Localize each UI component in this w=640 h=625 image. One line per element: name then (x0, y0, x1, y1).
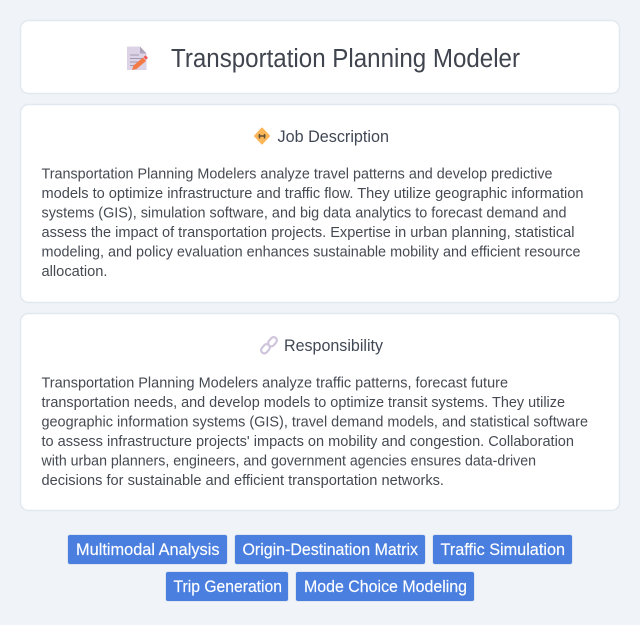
text block: responsibility: decisions for sustainable and efficient transportation networks. (42, 472, 444, 489)
panel: title header (20, 20, 620, 94)
icon: road sign (255, 128, 269, 144)
tag: Multimodal Analysis (68, 534, 228, 564)
text block: responsibility: Transportation Planning Modelers analyze traffic patterns, forecast future (42, 374, 508, 392)
heading: job description: Job Description (278, 128, 389, 146)
tag: Mode Choice Modeling: Mode Choice Modeling (304, 578, 467, 596)
tag: Origin-Destination Matrix (234, 534, 426, 564)
text block: job description (42, 166, 584, 280)
text block: responsibility: with urban planners, engineers, and government agencies ensures data-driven (41, 452, 536, 470)
text block: job description: models to optimize infrastructure and traffic flow. They utilize geographic information (42, 185, 584, 202)
tag: Trip Generation: Trip Generation (174, 578, 282, 596)
text block: responsibility: transportation needs, and develop models to optimize transit systems. They utilize (42, 394, 565, 411)
panel: responsibility (20, 314, 620, 510)
text block: job description: Transportation Planning Modelers analyze travel patterns and develop predictive (42, 166, 552, 182)
icon: chain link (260, 336, 278, 355)
text block: job description: assess the impact of transportation projects. Expertise in urban planning, statistical (42, 224, 574, 241)
text block: job description: systems (GIS), simulation software, and big data analytics to forecast demand and (42, 204, 566, 222)
tag: Traffic Simulation: Traffic Simulation (440, 541, 565, 559)
icon: document with pencil (127, 46, 148, 70)
title: Transportation Planning Modeler (171, 45, 520, 73)
text block: responsibility (41, 374, 588, 489)
tag: Mode Choice Modeling (296, 572, 474, 602)
tag: Multimodal Analysis: Multimodal Analysis (76, 541, 220, 559)
text block: job description: allocation. (42, 263, 108, 280)
tag: Traffic Simulation (432, 534, 572, 564)
tag: Trip Generation (166, 572, 288, 602)
text block: responsibility: geographic information systems (GIS), travel demand models, and statistical software (42, 414, 588, 430)
text block: job description: modeling, and policy evaluation enhances sustainable mobility and efficient resource (42, 244, 580, 260)
tag: Origin-Destination Matrix: Origin-Destination Matrix (242, 541, 419, 559)
text block: responsibility: to assess infrastructure projects' impacts on mobility and congestion. Collaboration (42, 433, 574, 450)
heading: responsibility: Responsibility (284, 337, 384, 355)
panel: job description (20, 104, 620, 302)
